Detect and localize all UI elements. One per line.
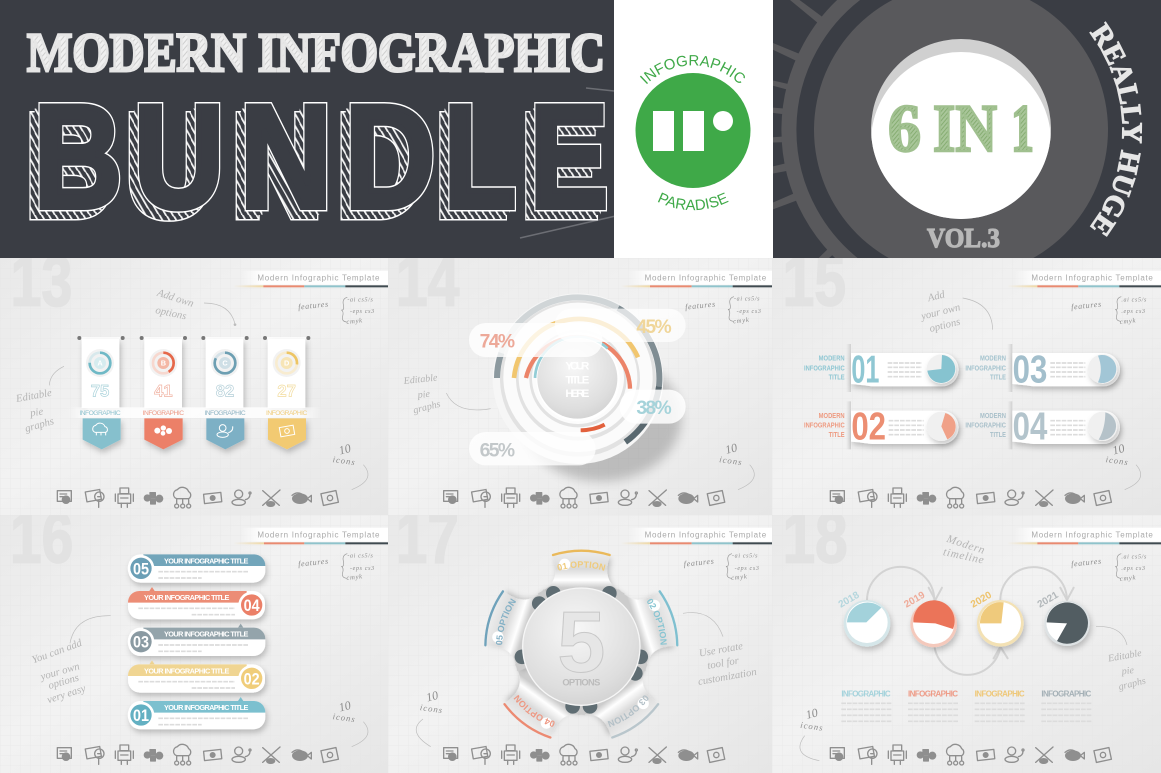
tab 03: INFOGRAPHIC [965, 363, 1007, 372]
tab 01: MODERN [819, 354, 845, 363]
bar 04 [128, 587, 265, 619]
note: features: -ai cs5/s [732, 554, 758, 560]
milestone 2018: 2018 [837, 590, 862, 610]
milestone 2020 [969, 590, 1024, 647]
ribbon band with labels: INFOGRAPHIC [204, 410, 246, 417]
text: 6 in 1: 6 [888, 90, 921, 166]
note: features: features [1071, 556, 1102, 569]
banner D: 27 [277, 381, 296, 400]
note: add your own options: Add [926, 289, 947, 304]
note: features: .eps cs3 [1121, 566, 1146, 572]
petal 03 option: 03 OPTION [608, 696, 648, 727]
center disc [522, 587, 641, 706]
center disc [536, 338, 620, 421]
note: features: -ai cs5/s [734, 297, 760, 303]
bar 04: YOUR INFOGRAPHIC TITLE [144, 593, 229, 602]
tab 01: 01 [851, 348, 879, 392]
note: features: features [1071, 299, 1102, 312]
note: add your own options: your own [919, 302, 962, 323]
pill: 74% [469, 323, 602, 357]
ring: salmon 74% [526, 337, 630, 389]
milestone 2019: 2019 [902, 590, 928, 610]
note: 10 icons: icons [800, 720, 824, 733]
petal 04 option [503, 662, 585, 739]
header strip: Modern Infographic Template [645, 274, 767, 283]
bar 05 [128, 554, 265, 583]
note: modern timeline [942, 533, 987, 567]
tab 04: 04 [1013, 405, 1047, 449]
note: add own options: options [154, 305, 187, 322]
panel: template 14 concentric pie rings [388, 241, 772, 512]
note: editable pie graphs: pie [1120, 665, 1135, 677]
panel: chalkboard title [0, 0, 620, 258]
note: add your own options: options [928, 317, 962, 335]
note: features [298, 297, 375, 326]
banner C: C [222, 359, 228, 368]
note: 10 icons: icons [719, 454, 743, 467]
pill: 38%: 38% [636, 398, 672, 419]
note: features: .ai cs5/s [1121, 554, 1147, 560]
center disc: OPTIONS [562, 677, 600, 687]
note: 10 icons [332, 441, 368, 490]
note: features: .eps cs3 [1121, 309, 1146, 315]
banner A: 75 [91, 381, 109, 400]
tab 02: 02 [851, 405, 886, 449]
note: editable pie graphs: Editable [1106, 648, 1143, 665]
bar 01: YOUR INFOGRAPHIC TITLE [164, 703, 248, 712]
note: features: features [683, 556, 715, 569]
tab 01 [804, 344, 959, 392]
center disc: YOUR [565, 361, 589, 373]
text block 1 [841, 690, 892, 721]
note: editable pie graphs [402, 372, 491, 416]
bar 02 [128, 660, 265, 693]
note: features: cmyk [1119, 317, 1137, 326]
panel: template 18 timeline [772, 498, 1161, 768]
banner D [263, 336, 310, 408]
bar 03: 03 [133, 633, 149, 652]
ring: yellow 45% [514, 319, 638, 378]
note: 10 icons [800, 705, 824, 761]
pill: 45% [555, 309, 686, 342]
header strip [621, 271, 776, 287]
note: editable pie graphs: Editable [14, 388, 53, 405]
note: you can add your own options: You can add [31, 638, 84, 666]
note: editable pie graphs: graphs [412, 399, 442, 416]
note: add own options: Add own [155, 287, 195, 310]
note: features: cmyk [731, 573, 748, 582]
tab 01: TITLE [829, 373, 845, 382]
note: 10 icons: icons [419, 702, 444, 715]
icon row [830, 487, 1111, 508]
header strip: Modern Infographic Template [257, 274, 380, 283]
pill: 65% [469, 432, 596, 465]
text: 6 in 1: IN [933, 90, 997, 166]
note: 10 icons [1105, 441, 1141, 490]
banner A [77, 336, 125, 408]
note: features: -ai cs5/s [347, 297, 374, 303]
ribbon band with labels: INFOGRAPHIC [266, 410, 308, 417]
note: features: cmyk [733, 317, 750, 325]
note: editable pie graphs: graphs [1117, 675, 1147, 693]
tab 02: TITLE [829, 430, 845, 439]
logo text: paradise: PARADISE [658, 192, 728, 210]
note: 10 icons: icons [332, 711, 357, 724]
note: features [685, 297, 761, 325]
panel: template 15 numbered tabs [772, 241, 1161, 512]
timeline arrows [867, 567, 1074, 675]
tag: money [268, 418, 306, 449]
note: editable pie graphs: pie [29, 407, 44, 419]
dark gaps between petals [513, 586, 650, 717]
center disc: TITLE [565, 374, 590, 386]
panel: template 17 five options wheel [388, 498, 772, 768]
tag: cloud [83, 418, 121, 449]
header strip: Modern Infographic Template [257, 531, 380, 540]
pill: 38% [620, 390, 686, 424]
center disc: HERE [565, 388, 590, 400]
note: features [1071, 297, 1147, 326]
logo text: infographic: INFOGRAPHIC [640, 55, 745, 84]
note: 10 icons: 10 [804, 705, 819, 722]
note: editable pie graphs: pie [416, 389, 431, 401]
note: features: cmyk [346, 317, 363, 326]
pill: 45%: 45% [636, 317, 672, 338]
text: 6 in 1: 1 [1011, 90, 1034, 166]
tag: person [206, 418, 244, 449]
bar 04: 04 [244, 596, 260, 615]
header strip [233, 528, 388, 544]
panel number: 14 [396, 241, 459, 321]
title: bundle in hatched outline letters: L [444, 75, 516, 238]
header strip [1007, 528, 1161, 544]
bar 03: YOUR INFOGRAPHIC TITLE [164, 630, 248, 639]
note: features: -eps cs3 [350, 566, 375, 572]
center disc: 5 [557, 595, 605, 691]
title: bundle in hatched outline letters: U [134, 75, 224, 238]
note: features: .ai cs5/s [1121, 297, 1147, 303]
note: features: features [298, 299, 329, 312]
ribbon band with labels: INFOGRAPHIC [79, 410, 121, 417]
title: modern infographic: MODERN INFOGRAPHIC [27, 22, 605, 83]
note: use rotate tool for customization [683, 613, 757, 688]
banner B: B [161, 359, 166, 368]
panel number: 15 [783, 241, 846, 321]
header strip [621, 528, 776, 544]
panel: infographic paradise logo [614, 0, 773, 258]
note: you can add your own options: options [47, 673, 80, 692]
banner D: D [284, 359, 289, 368]
header strip: Modern Infographic Template [645, 531, 767, 540]
petal 01 option: 01 OPTION [557, 561, 606, 571]
ribbon band with labels: INFOGRAPHIC [143, 410, 184, 417]
petal 02 option [618, 589, 678, 674]
note: features: features [298, 556, 329, 569]
text: really huge: REALLY HUGE [1089, 21, 1142, 237]
note: 10 icons: icons [332, 454, 357, 467]
note: add your own options [919, 289, 993, 335]
note: features: -ai cs5/s [347, 554, 374, 560]
icon row [444, 744, 725, 765]
text block 2 [908, 690, 959, 721]
banner A: A [97, 359, 103, 368]
note: add own options [154, 287, 236, 326]
tab 04: INFOGRAPHIC [965, 420, 1007, 429]
bar 02: 02 [244, 669, 260, 688]
header strip: Modern Infographic Template [1031, 531, 1153, 540]
note: use rotate tool for customization: customization [697, 667, 757, 688]
text block 4: INFOGRAPHIC [1041, 690, 1092, 699]
bar 05: 05 [133, 559, 149, 578]
note: modern timeline: timeline [942, 546, 985, 567]
note: features: cmyk [1119, 574, 1137, 583]
icon row [444, 487, 725, 508]
note: 10 icons [416, 688, 444, 747]
title: bundle in hatched outline letters: E [530, 75, 608, 238]
title: bundle in hatched outline letters: D [345, 75, 435, 238]
note: 10 icons [332, 698, 368, 747]
note: editable pie graphs [14, 366, 64, 435]
pill: 65%: 65% [480, 440, 515, 461]
title: bundle in hatched outline letters: N [240, 75, 332, 238]
milestone 2019 [902, 590, 957, 647]
text block 4 [1041, 690, 1092, 721]
petal 01 option [538, 550, 626, 595]
note: features: features [685, 299, 716, 312]
icon row [830, 744, 1111, 765]
note: editable pie graphs [1096, 627, 1147, 693]
tab 03 [965, 344, 1120, 392]
ring: teal 38% [535, 337, 607, 378]
bar 01: 01 [133, 706, 149, 725]
bar 03 [128, 624, 265, 656]
tab 03: MODERN [980, 354, 1006, 363]
panel number: 18 [783, 498, 848, 578]
note: you can add your own options: your own [39, 661, 81, 683]
note: you can add your own options: very easy [46, 683, 87, 706]
panel number: 16 [10, 498, 73, 578]
milestone 2021 [1036, 590, 1090, 646]
note: editable pie graphs: graphs [24, 416, 55, 435]
header strip [1007, 271, 1161, 287]
text: 6 in 1 [888, 90, 1034, 166]
banner B [140, 336, 187, 408]
tab 04 [965, 401, 1120, 449]
text block 3: INFOGRAPHIC [975, 690, 1025, 699]
note: 10 icons: 10 [337, 441, 352, 458]
note: 10 icons: 10 [337, 698, 352, 715]
petal 02 option: 02 OPTION [647, 598, 667, 645]
ring: grey 65% [497, 297, 659, 442]
panel: template 16 stacked bars [0, 498, 388, 768]
tab 04: TITLE [990, 430, 1006, 439]
bar 05: YOUR INFOGRAPHIC TITLE [164, 556, 248, 565]
header strip [233, 271, 388, 287]
tab 04: MODERN [980, 411, 1006, 420]
petal 05 option: 05 OPTION [496, 598, 516, 645]
ribbon band with labels [68, 407, 322, 418]
concentric rings chart [493, 293, 681, 481]
header strip: Modern Infographic Template [1031, 274, 1153, 283]
note: features [683, 554, 759, 582]
pill: 74%: 74% [480, 331, 515, 352]
icon row [57, 744, 338, 765]
note: editable pie graphs: Editable [402, 372, 439, 387]
milestone 2021: 2021 [1036, 590, 1061, 610]
panel: template 13 banners [0, 241, 388, 512]
tab 01: INFOGRAPHIC [804, 363, 845, 372]
note: use rotate tool for customization: tool for [707, 655, 741, 672]
milestone 2018 [837, 590, 890, 647]
note: features: cmyk [346, 573, 363, 582]
note: modern timeline: Modern [944, 533, 987, 557]
note: features: -eps cs3 [735, 566, 759, 572]
milestone 2020: 2020 [969, 590, 994, 610]
note: features [298, 554, 375, 582]
text block 1: INFOGRAPHIC [841, 690, 891, 699]
panel: six in one badge [773, 0, 1161, 258]
text block 2: INFOGRAPHIC [908, 690, 958, 699]
tab 03: TITLE [990, 373, 1006, 382]
note: 10 icons: icons [1105, 454, 1130, 467]
tab 02: INFOGRAPHIC [804, 420, 845, 429]
note: use rotate tool for customization: Use rotate [698, 641, 744, 660]
petal 04 option: 04 OPTION [514, 694, 555, 727]
note: 10 icons [719, 440, 754, 490]
title: bundle in hatched outline letters: B [34, 75, 122, 238]
note: you can add your own options [31, 616, 111, 706]
petal 03 option [575, 664, 660, 739]
text: vol.3: VOL.3 [927, 223, 1000, 253]
petal 05 option [484, 588, 548, 672]
note: 10 icons: 10 [723, 440, 739, 457]
bar 02: YOUR INFOGRAPHIC TITLE [144, 666, 229, 675]
icon row [57, 487, 338, 508]
banner C: 82 [216, 381, 234, 400]
banner C [201, 336, 249, 408]
bar 01 [128, 697, 265, 729]
note: features: -eps cs3 [350, 309, 375, 315]
icon: green logo circle [636, 73, 750, 188]
text block 3 [975, 690, 1025, 721]
note: 10 icons: 10 [424, 688, 440, 705]
panel number: 17 [396, 498, 459, 578]
banner B: 41 [154, 381, 173, 400]
tab 02 [804, 401, 959, 449]
tab 03: 03 [1013, 348, 1047, 392]
note: features: -eps cs3 [737, 309, 761, 315]
title: bundle in hatched outline letters [25, 75, 608, 247]
note: features [1071, 554, 1147, 583]
tab 02: MODERN [819, 411, 845, 420]
tag: puzzle [144, 418, 183, 449]
panel number: 13 [11, 241, 72, 321]
note: 10 icons: 10 [1111, 441, 1126, 458]
option wheel [484, 550, 678, 739]
